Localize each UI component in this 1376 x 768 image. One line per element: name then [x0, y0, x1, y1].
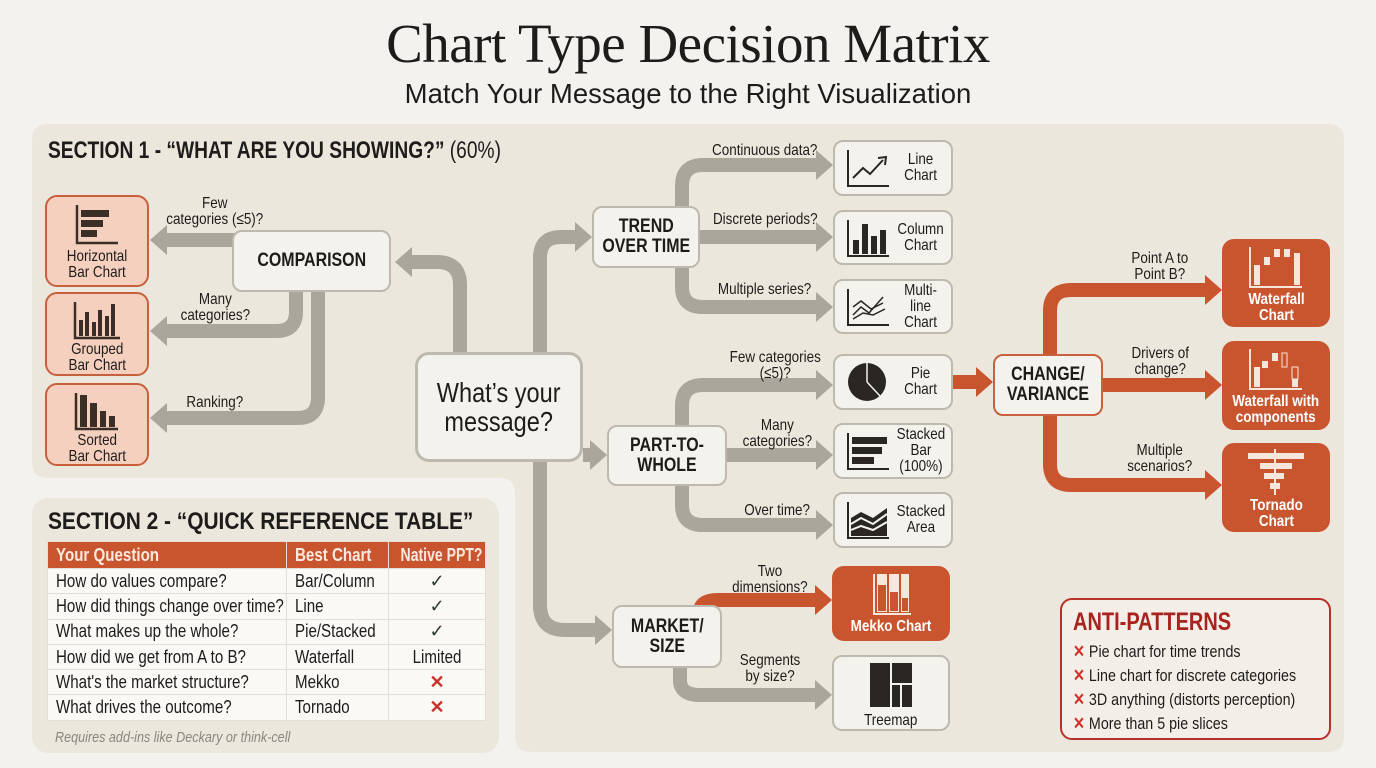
box: horizontal bar chart: Bar Chart [68, 264, 126, 281]
text: Point B? [1135, 266, 1185, 283]
box: line chart [833, 140, 953, 196]
box: grouped bar chart: Bar Chart [68, 357, 126, 374]
branch labels: categories (≤5)? [166, 211, 264, 228]
box: what's your message [415, 352, 583, 462]
title: Chart Type Decision Matrix [386, 13, 990, 74]
text: (≤5)? [759, 365, 791, 382]
box: part-to-whole: WHOLE [637, 454, 697, 476]
box: what's your message: What’s your [437, 377, 561, 408]
text: Drivers of [1131, 345, 1189, 362]
box: stacked bar 100%: Bar [911, 442, 931, 459]
box: stacked bar 100%: (100%) [899, 458, 943, 475]
box: market/size: MARKET/ [631, 616, 703, 637]
anti-patterns callout: ✕ Line chart for discrete categories [1073, 666, 1296, 685]
reference table [48, 542, 485, 720]
box: tornado chart: Chart [1258, 513, 1294, 530]
box: part-to-whole [607, 425, 727, 486]
anti-patterns callout: ✕ Pie chart for time trends [1073, 642, 1241, 661]
text: Ranking? [187, 394, 243, 411]
reference table: Waterfall [295, 647, 354, 667]
text: change? [1134, 361, 1186, 378]
reference table: Native PPT? [401, 544, 482, 564]
box: market/size: SIZE [649, 636, 685, 656]
reference table: How do values compare? [56, 571, 227, 591]
reference table: How did we get from A to B? [56, 647, 246, 667]
box: part-to-whole: PART-TO- [630, 435, 704, 456]
reference table: ✓ [429, 571, 445, 591]
text: Continuous data? [712, 142, 818, 159]
text: Discrete periods? [713, 211, 817, 228]
box: waterfall with components: components [1236, 409, 1316, 426]
box: stacked area: Area [907, 519, 935, 536]
box: waterfall with components: Waterfall with [1233, 393, 1319, 410]
box: what's your message: message? [445, 406, 553, 437]
box: treemap [832, 655, 950, 731]
text: by size? [745, 668, 795, 685]
text: Many [761, 417, 794, 434]
box: stacked bar 100%: Stacked [897, 426, 945, 443]
reference table: Pie/Stacked [295, 621, 376, 641]
text: Over time? [745, 502, 810, 519]
reference table: What makes up the whole? [56, 621, 238, 641]
box: grouped bar chart [45, 292, 149, 376]
text: scenarios? [1128, 458, 1192, 475]
text: categories? [743, 433, 812, 450]
box: column chart: Column [898, 220, 944, 238]
box: stacked bar 100% [833, 423, 953, 479]
reference table: Your Question [56, 544, 159, 564]
box: multi-line chart: Chart [905, 314, 937, 330]
box: tornado chart [1222, 443, 1330, 532]
box: mekko chart [832, 566, 950, 641]
box: trend over time: OVER TIME [602, 236, 690, 257]
box: comparison: COMPARISON [257, 250, 366, 271]
box: mekko chart: Mekko Chart [851, 618, 931, 635]
box: pie chart: Pie [911, 365, 931, 382]
box: change/variance: CHANGE/ [1011, 364, 1085, 385]
box: multi-line chart [833, 279, 953, 334]
box: waterfall chart: Chart [1258, 307, 1294, 324]
text: Few categories [729, 349, 821, 366]
section 1 heading: SECTION 1 - “WHAT ARE YOU SHOWING?” (60%) [48, 137, 501, 164]
text: categories? [180, 307, 250, 324]
reference table: ✓ [429, 621, 445, 641]
subtitle: Match Your Message to the Right Visualization [405, 78, 971, 109]
box: line chart: Chart [905, 167, 937, 184]
reference table: Bar/Column [295, 571, 375, 591]
box: column chart: Chart [905, 236, 937, 254]
box: trend over time: TREND [619, 216, 673, 237]
text: Multiple [1137, 442, 1183, 459]
branch labels [166, 195, 264, 228]
anti-patterns callout [1060, 598, 1331, 740]
text: Multiple series? [718, 281, 812, 298]
reference table: Limited [413, 647, 461, 667]
text: Two [758, 563, 782, 580]
reference table: Tornado [295, 697, 350, 717]
box: sorted bar chart: Sorted [77, 432, 117, 449]
box: horizontal bar chart: Horizontal [67, 248, 127, 265]
box: horizontal bar chart [45, 195, 149, 287]
anti-patterns callout: ANTI-PATTERNS [1073, 608, 1231, 636]
box: waterfall chart [1222, 239, 1330, 327]
footnote: Requires add-ins like Deckary or think-cell [55, 729, 290, 746]
reference table: ✓ [429, 596, 445, 616]
box: column chart [833, 210, 953, 265]
anti-patterns callout: ✕ 3D anything (distorts perception) [1073, 690, 1295, 709]
section 2 heading: SECTION 2 - “QUICK REFERENCE TABLE” [48, 508, 473, 535]
reference table: Line [295, 596, 324, 616]
panel: section 2 background [32, 498, 499, 753]
box: waterfall with components [1222, 341, 1330, 430]
reference table: What drives the outcome? [56, 697, 232, 717]
reference table: What's the market structure? [56, 672, 249, 692]
box: change/variance: VARIANCE [1007, 384, 1089, 405]
box: line chart: Line [908, 151, 934, 168]
box: stacked area [833, 492, 953, 548]
box: waterfall chart: Waterfall [1248, 291, 1304, 308]
box: sorted bar chart [45, 383, 149, 466]
box: grouped bar chart: Grouped [71, 341, 123, 358]
box: pie chart [833, 354, 953, 410]
text: Many [199, 291, 231, 308]
box: multi-line chart: Multi- [905, 282, 937, 298]
box: comparison [232, 230, 391, 292]
reference table: Mekko [295, 672, 340, 692]
box: stacked area: Stacked [897, 503, 945, 520]
text: Segments [740, 652, 800, 669]
box: multi-line chart: line [911, 298, 931, 314]
box: treemap: Treemap [864, 712, 918, 729]
reference table: ✕ [429, 672, 445, 692]
anti-patterns callout: ✕ More than 5 pie slices [1073, 714, 1228, 733]
box: change/variance [993, 354, 1103, 416]
reference table: How did things change over time? [56, 596, 284, 616]
reference table: Best Chart [295, 544, 371, 564]
reference table: ✕ [429, 697, 445, 717]
box: market/size [612, 605, 722, 668]
text: Point A to [1132, 250, 1188, 267]
box: pie chart: Chart [905, 381, 937, 398]
box: sorted bar chart: Bar Chart [68, 448, 126, 465]
box: tornado chart: Tornado [1250, 497, 1302, 514]
box: trend over time [592, 206, 700, 268]
branch labels: Few [202, 195, 228, 212]
text: dimensions? [732, 579, 808, 596]
